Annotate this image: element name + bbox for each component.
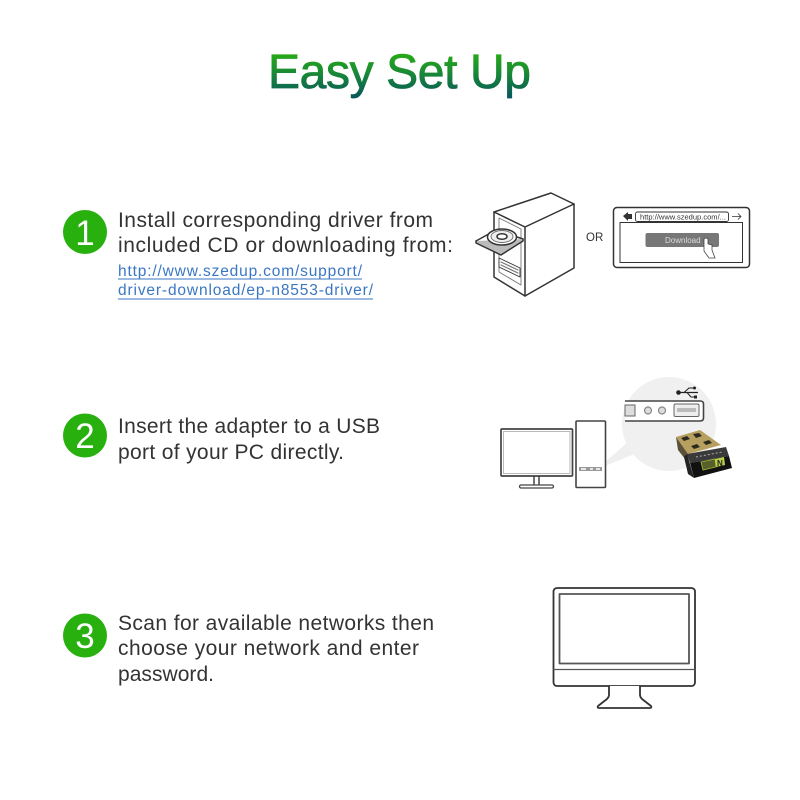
step 2 instruction text: Insert the adapter to a USB (118, 415, 380, 438)
step 1 driver link: http://www.szedup.com/support/ (118, 263, 363, 280)
step 2 instruction text (118, 415, 380, 464)
step 2 number badge: 2 (75, 417, 95, 456)
USB wifi adapter (676, 430, 732, 478)
step 1 instruction text: included CD or downloading from: (118, 234, 453, 257)
title: Easy Set Up (268, 46, 531, 99)
port panel (625, 401, 704, 421)
step 2 instruction text: port of your PC directly. (118, 441, 344, 464)
step 3 instruction text: Scan for available networks then (118, 612, 434, 635)
monitor (501, 429, 572, 488)
step 1 number badge (63, 210, 107, 254)
tower (576, 421, 606, 488)
icon: browser download window: http://www.szedup.com/... (640, 212, 726, 222)
icon: browser download window: Download (665, 236, 701, 245)
icon: computer tower with CD tray (476, 193, 574, 296)
step 2 (63, 377, 732, 488)
step 1 (63, 193, 750, 299)
step 3 instruction text: password. (118, 663, 214, 686)
OR label: OR (586, 232, 603, 244)
USB wifi adapter: N (717, 459, 723, 468)
icon: browser download window (614, 208, 750, 268)
step 1 instruction text: Install corresponding driver from (118, 209, 433, 232)
step 1 number badge: 1 (75, 214, 95, 253)
icon: USB symbol (676, 386, 698, 398)
magnifier circle (605, 377, 716, 471)
step 2 number badge (63, 414, 107, 458)
icon: desktop PC with USB adapter (501, 377, 732, 488)
step 3 instruction text: choose your network and enter (118, 637, 419, 660)
step 3 number badge: 3 (75, 617, 95, 656)
step 3 (63, 588, 695, 708)
step 1 instruction text (118, 209, 453, 257)
step 1 driver link (118, 263, 374, 299)
step 1 driver link: driver-download/ep-n8553-driver/ (118, 282, 374, 299)
step 3 number badge (63, 614, 107, 658)
step 3 instruction text (118, 612, 434, 686)
icon: monitor (554, 588, 695, 708)
